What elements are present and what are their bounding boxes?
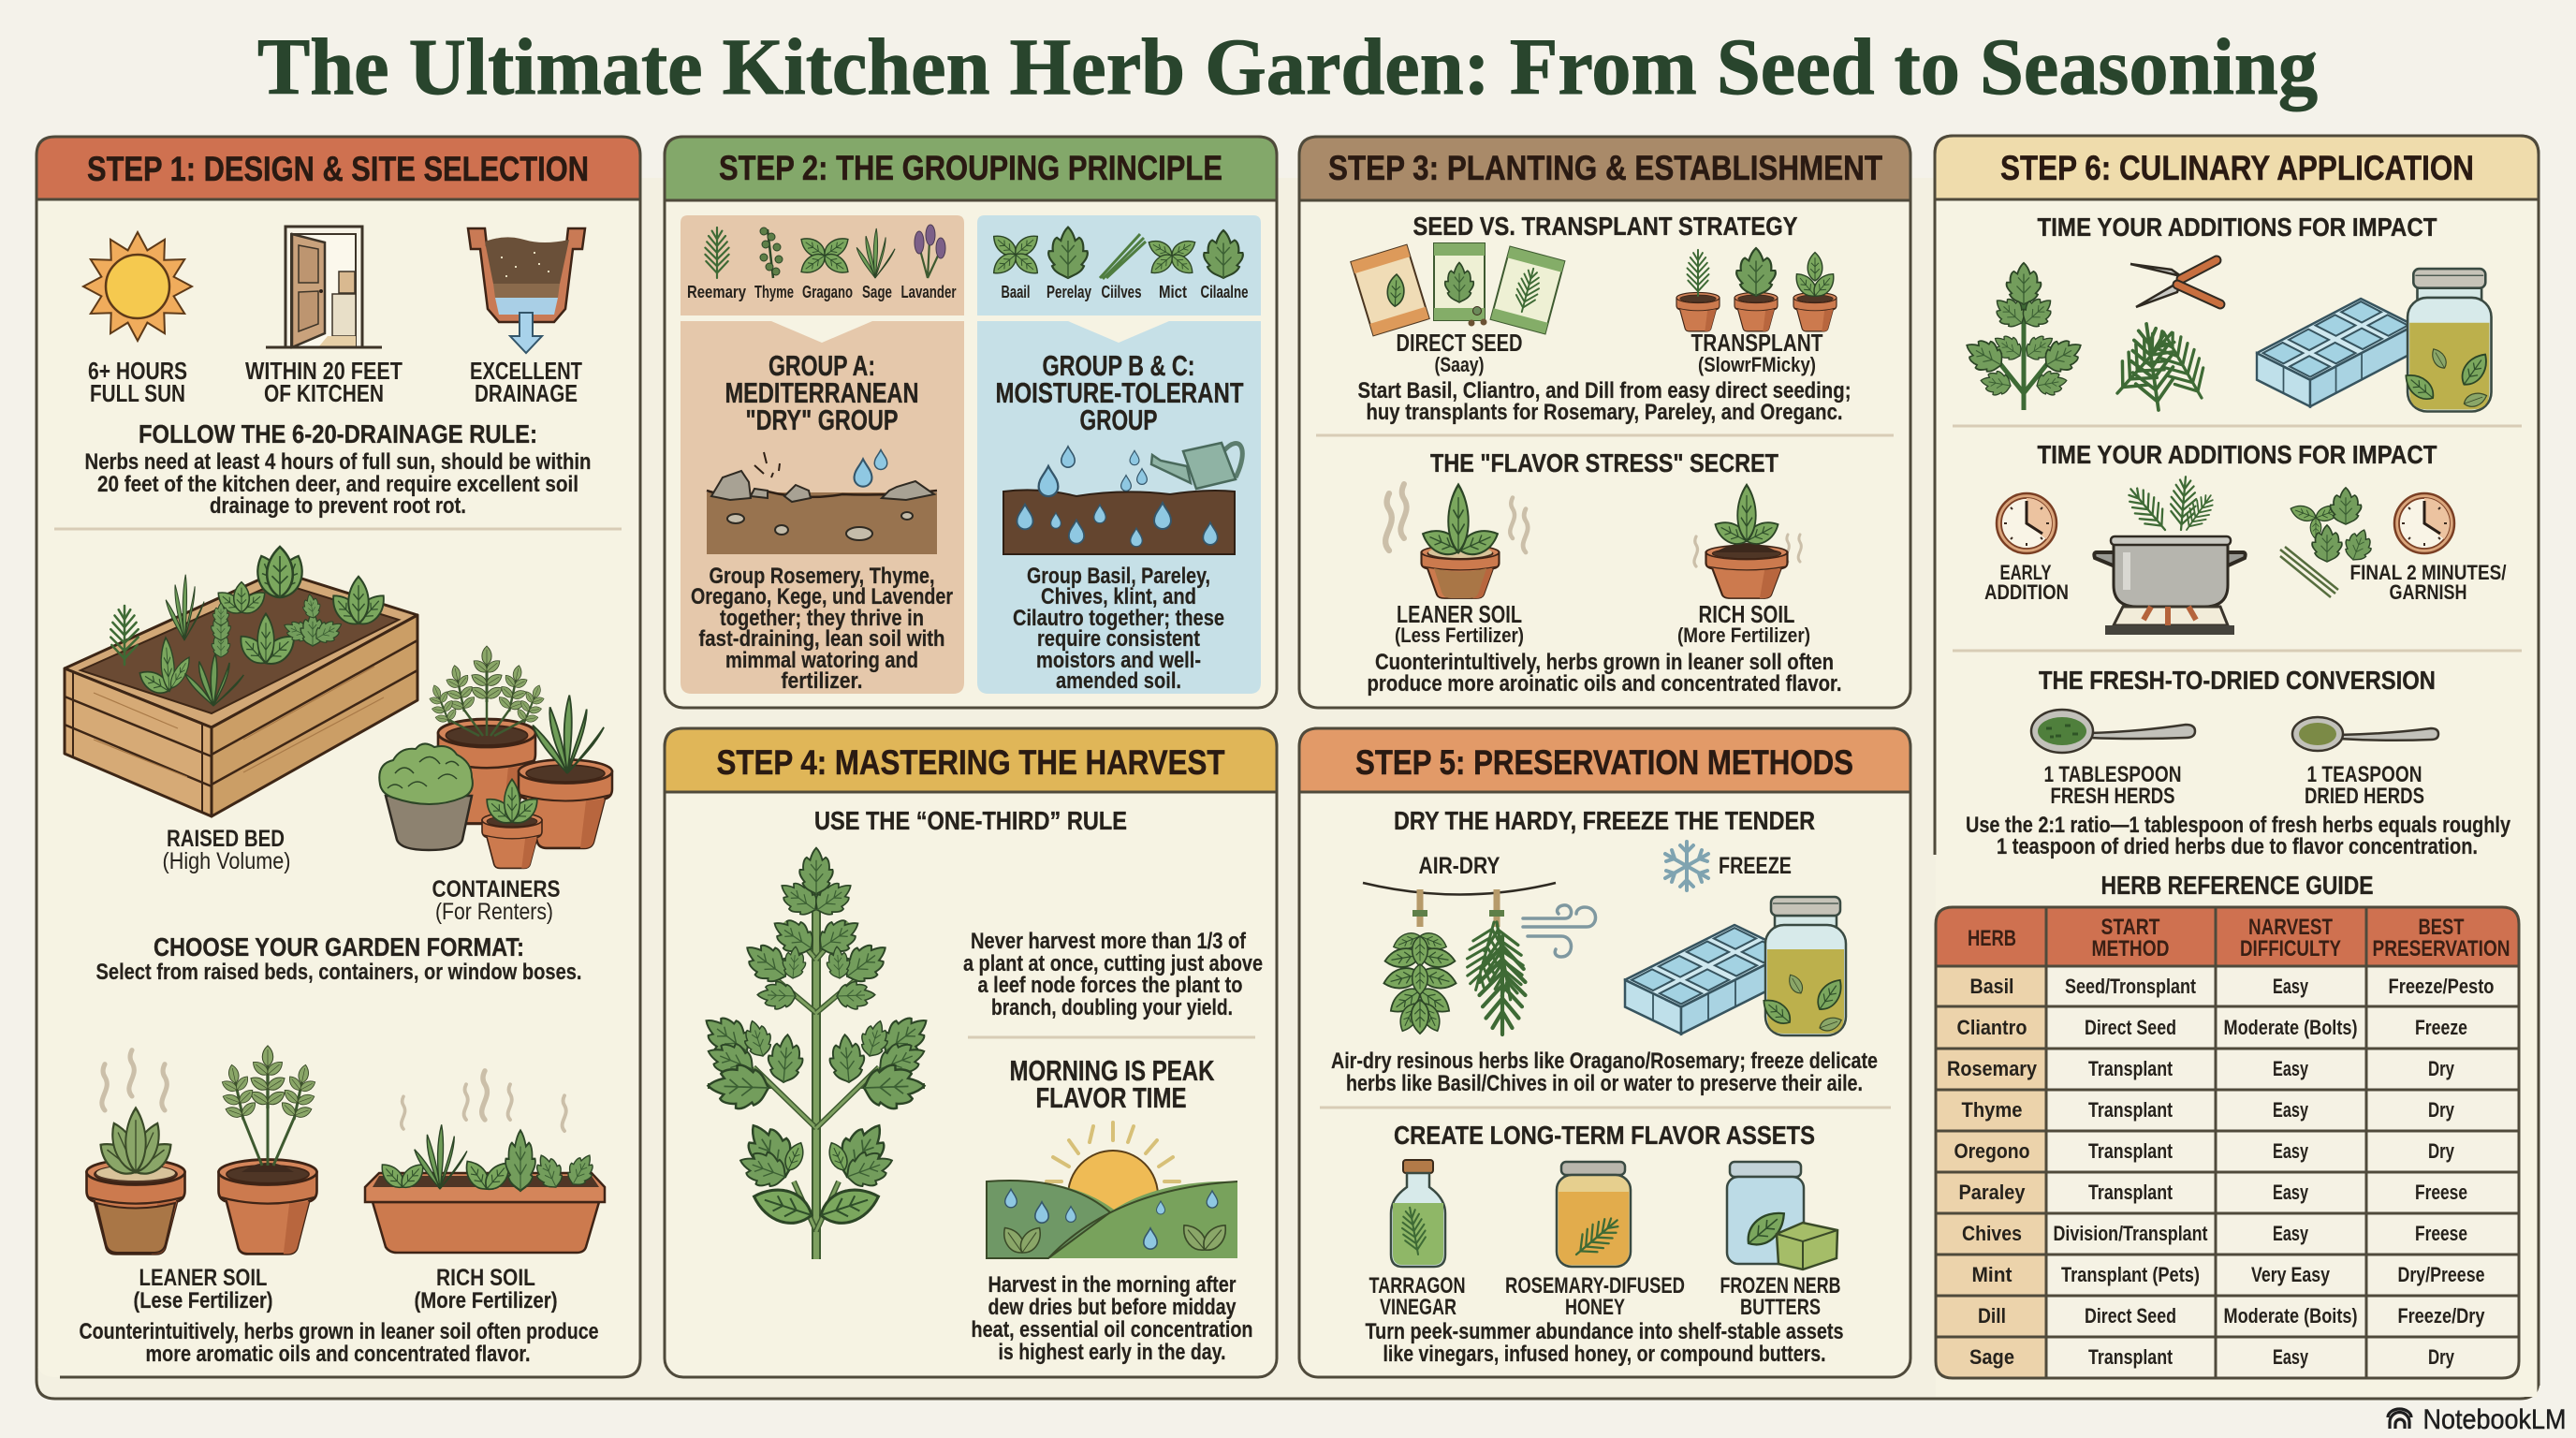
row: cilantro: Freeze	[2415, 1016, 2467, 1039]
row: mint: Very Easy	[2251, 1263, 2331, 1286]
label: rich soil	[1677, 600, 1810, 647]
label: containers: CONTAINERS	[432, 876, 560, 902]
heading: group B and C: MOISTURE-TOLERANT	[996, 376, 1244, 409]
label: rosemary honey: ROSEMARY-DIFUSED	[1505, 1273, 1685, 1299]
row: oregano: Easy	[2273, 1139, 2309, 1163]
panel: step 3 planting and establishment	[1299, 137, 1910, 708]
text: group B and C body: moistors and well-	[1036, 648, 1201, 673]
heading: garden format: CHOOSE YOUR GARDEN FORMAT:	[154, 932, 524, 961]
labels: moist herbs: Ciilves	[1101, 283, 1142, 301]
label: transplant: (SlowrFMicky)	[1698, 353, 1816, 376]
icon: clock early	[1997, 493, 2056, 553]
text: dry and freeze body: Air-dry resinous herbs like Oragano/Rosemary; freeze delicate	[1331, 1049, 1878, 1074]
label: raised bed	[163, 826, 290, 874]
labels: moist herbs: Perelay	[1046, 283, 1091, 301]
text: morning body	[972, 1272, 1252, 1365]
text: flavor assets body	[1365, 1319, 1844, 1367]
label: teaspoon: 1 TEASPOON	[2306, 762, 2422, 787]
row: rosemary: Dry	[2428, 1057, 2455, 1080]
heading: group A: MEDITERRANEAN	[724, 376, 919, 409]
text: drainage rule body: Nerbs need at least 4 hours of full sun, should be within	[84, 449, 592, 475]
heading: group A: "DRY" GROUP	[745, 404, 899, 436]
illustration: leaner pot	[1385, 484, 1528, 598]
label: within 20 feet: WITHIN 20 FEET	[245, 357, 402, 385]
text: seed strategy body: Start Basil, Cliantro, and Dill from easy direct seeding;	[1357, 378, 1852, 404]
icons: moist herbs	[989, 227, 1243, 279]
text: group A body: mimmal watoring and	[725, 648, 918, 673]
heading: flavor stress: THE "FLAVOR STRESS" SECRET	[1430, 448, 1778, 477]
row: chives: Easy	[2273, 1222, 2309, 1245]
row: rosemary: Transplant	[2088, 1057, 2174, 1080]
bed plant: broad leaves back	[251, 547, 309, 602]
label: containers: (For Renters)	[435, 899, 553, 925]
row: mint: Mint	[1971, 1263, 2012, 1286]
text: morning body: heat, essential oil concentration	[972, 1317, 1252, 1343]
label: excellent drainage: EXCELLENT	[470, 357, 582, 385]
text: conversion body: 1 teaspoon of dried herbs due to flavor concentration.	[1997, 834, 2478, 859]
text: group B and C body: amended soil.	[1056, 668, 1181, 694]
row: sage: Dry	[2428, 1345, 2455, 1369]
illustration: tender herbs	[2280, 488, 2377, 597]
label: leaner soil: LEANER SOIL	[1397, 600, 1522, 628]
row: oregano: Dry	[2428, 1139, 2455, 1163]
bed plant: front blades	[185, 653, 243, 706]
icons: transplant pots	[1676, 248, 1839, 331]
text: group A body: Group Rosemery, Thyme,	[710, 564, 934, 589]
label: excellent drainage: DRAINAGE	[475, 379, 578, 407]
labels: moist herbs	[1002, 283, 1249, 301]
icon: tarragon vinegar bottle	[1391, 1160, 1445, 1267]
card: group A	[681, 215, 964, 694]
label: teaspoon	[2305, 762, 2424, 809]
labels: dry herbs: Gragano	[802, 283, 853, 301]
label: tarragon vinegar: VINEGAR	[1380, 1295, 1456, 1320]
row: chives	[1962, 1222, 2467, 1245]
illustration: morning sunrise	[987, 1123, 1237, 1258]
text: one-third rule body: a plant at once, cutting just above	[963, 951, 1263, 976]
icon: kitchen door	[266, 227, 382, 347]
heading: fresh to dried: THE FRESH-TO-DRIED CONVERSION	[2039, 666, 2436, 695]
label: frozen herb butters: BUTTERS	[1740, 1295, 1821, 1320]
illustration: dry rocky soil	[707, 449, 937, 554]
text: group A body: fertilizer.	[781, 668, 863, 694]
illustration: herb plant	[695, 848, 937, 1259]
label: excellent drainage	[470, 357, 582, 407]
row: dill: Dill	[1978, 1304, 2006, 1328]
text: one-third rule body: a leef node forces the plant to	[977, 973, 1243, 998]
label: rosemary honey	[1505, 1273, 1685, 1320]
text: drainage rule body	[84, 449, 592, 519]
text: one-third rule body: branch, doubling your yield.	[991, 995, 1233, 1020]
text: morning body: is highest early in the day.	[998, 1340, 1226, 1365]
label: within 20 feet	[245, 357, 402, 407]
label: full sun	[88, 357, 187, 407]
labels: dry herbs: Sage	[862, 283, 892, 301]
illustration: fresh parsley	[1959, 263, 2088, 410]
row: cilantro: Cliantro	[1956, 1016, 2027, 1039]
bed plant: tall blades	[166, 575, 204, 640]
row: basil: Seed/Tronsplant	[2065, 975, 2197, 998]
heading: morning peak: MORNING IS PEAK	[1009, 1054, 1215, 1087]
label: tablespoon: FRESH HERDS	[2050, 784, 2175, 809]
row: basil: Basil	[1969, 975, 2014, 998]
row: oregano: Oregono	[1954, 1139, 2029, 1163]
text: seed strategy body: huy transplants for Rosemary, Pareley, and Oreganc.	[1367, 400, 1842, 425]
text: flavor stress body	[1367, 650, 1842, 697]
heading: one-third rule: USE THE “ONE-THIRD” RULE	[814, 806, 1127, 835]
label: tablespoon	[2044, 762, 2181, 809]
row: thyme	[1962, 1098, 2455, 1122]
row: dill: Direct Seed	[2085, 1304, 2176, 1328]
row: sage: Transplant	[2088, 1345, 2174, 1369]
label: rich soil: (More Fertilizer)	[1677, 624, 1810, 647]
label: full sun: 6+ HOURS	[88, 357, 187, 385]
table header: START	[2100, 915, 2160, 940]
table header: HERB	[1968, 926, 2016, 951]
table grid	[1936, 907, 2519, 1378]
panel: step 6 culinary application	[1935, 136, 2539, 1397]
label: raised bed: (High Volume)	[163, 848, 290, 874]
row: rosemary: Rosemary	[1947, 1057, 2038, 1080]
heading: 6-20-drainage rule: FOLLOW THE 6-20-DRAINAGE RULE:	[139, 419, 537, 448]
label: final garnish: GARNISH	[2389, 580, 2467, 604]
text: conversion body	[1966, 813, 2511, 859]
label: direct seed: (Saay)	[1434, 353, 1485, 376]
text: morning body: Harvest in the morning after	[988, 1272, 1236, 1298]
row: parsley: Freese	[2415, 1181, 2467, 1204]
illustration: window box	[365, 1071, 605, 1253]
bed plant: low clump	[213, 582, 270, 618]
heading: group A: GROUP A:	[768, 349, 875, 382]
label: containers	[432, 876, 560, 925]
label: transplant	[1690, 329, 1823, 376]
row: rosemary: Easy	[2273, 1057, 2309, 1080]
heading: herb reference guide: HERB REFERENCE GUIDE	[2100, 871, 2374, 900]
text: group A body: Oregano, Kege, und Lavender	[691, 584, 953, 609]
label: leaner soil: (Less Fertilizer)	[1395, 624, 1524, 647]
table header: NARVEST	[2248, 915, 2333, 940]
row: dill: Moderate (Boits)	[2224, 1304, 2357, 1328]
card: group B and C	[977, 215, 1261, 694]
text: dry and freeze body	[1331, 1049, 1878, 1096]
icon: frozen herb butter	[1727, 1162, 1837, 1269]
label: tarragon vinegar	[1368, 1273, 1466, 1320]
label: direct seed	[1397, 329, 1522, 376]
icon: pruning shears	[2130, 260, 2220, 307]
labels: moist herbs: Mict	[1159, 283, 1187, 301]
row: mint: Transplant (Pets)	[2061, 1263, 2200, 1286]
label: freeze: FREEZE	[1719, 853, 1792, 879]
text: group B and C body: Group Basil, Pareley,	[1027, 564, 1210, 589]
label: leaner soil: (Lese Fertilizer)	[133, 1288, 273, 1313]
row: sage: Easy	[2273, 1345, 2309, 1369]
heading: group B and C: GROUP B & C:	[1043, 349, 1194, 382]
icons: dry herbs	[705, 225, 945, 278]
heading: group A	[724, 349, 919, 436]
illustration: containers	[379, 646, 612, 868]
row: thyme: Thyme	[1962, 1098, 2022, 1122]
illustration: cut herbs	[2103, 320, 2217, 413]
row: basil: Freeze/Pesto	[2389, 975, 2494, 998]
heading: step 6: STEP 6: CULINARY APPLICATION	[2000, 149, 2474, 187]
row: cilantro	[1956, 1016, 2467, 1039]
row: basil: Easy	[2273, 975, 2309, 998]
row: parsley: Easy	[2273, 1181, 2309, 1204]
row: parsley: Transplant	[2088, 1181, 2174, 1204]
label: final garnish	[2349, 561, 2507, 604]
labels: moist herbs: Cilaalne	[1200, 283, 1249, 301]
icons: seed packets	[1351, 243, 1564, 335]
label: teaspoon: DRIED HERDS	[2305, 784, 2424, 809]
row: parsley: Paraley	[1958, 1181, 2026, 1204]
label: early addition	[1984, 561, 2069, 604]
row: chives: Chives	[1962, 1222, 2022, 1245]
label: final garnish: FINAL 2 MINUTES/	[2349, 561, 2507, 584]
row: mint: Dry/Preese	[2398, 1263, 2484, 1286]
row: dill: Freeze/Dry	[2398, 1304, 2485, 1328]
labels: dry herbs: Reemary	[687, 283, 746, 301]
label: rosemary honey: HONEY	[1565, 1295, 1625, 1320]
heading: step 5: STEP 5: PRESERVATION METHODS	[1355, 743, 1853, 782]
row: sage: Sage	[1969, 1345, 2014, 1369]
table header: PRESERVATION	[2372, 936, 2510, 961]
panel: step 5 preservation methods	[1299, 728, 1910, 1377]
heading: morning peak	[1009, 1054, 1215, 1114]
table header	[1968, 915, 2510, 961]
text: garden format body: Select from raised beds, containers, or window boses.	[95, 960, 582, 985]
label: leaner soil: LEANER SOIL	[139, 1265, 268, 1291]
row: thyme: Easy	[2273, 1098, 2309, 1122]
text: morning body: dew dries but before midday	[988, 1295, 1237, 1320]
icon: snowflake	[1665, 842, 1708, 890]
icon: NotebookLM logo	[2388, 1409, 2411, 1429]
bundle: rosemary	[1460, 889, 1529, 1034]
title: The Ultimate Kitchen Herb Garden: From Seed to Seasoning	[257, 22, 2318, 111]
table header: METHOD	[2091, 936, 2170, 961]
illustration: moist soil and watering can	[1003, 443, 1242, 554]
row: cilantro: Moderate (Bolts)	[2224, 1016, 2357, 1039]
row: chives: Freese	[2415, 1222, 2467, 1245]
panel: step 1 design and site selection	[37, 137, 640, 1377]
text: group B and C body: Chives, klint, and	[1041, 584, 1196, 609]
label: rich soil: RICH SOIL	[1698, 600, 1795, 628]
labels: dry herbs: Lavander	[900, 283, 957, 301]
heading: group B and C	[996, 349, 1244, 436]
text: group B and C body	[1013, 564, 1224, 694]
label: early addition: ADDITION	[1984, 580, 2069, 604]
row: rosemary	[1947, 1057, 2455, 1080]
row: dill	[1978, 1304, 2485, 1328]
icon: wind	[1523, 905, 1596, 957]
text: flavor stress body: Cuonterintultively, herbs grown in leaner soll often	[1375, 650, 1834, 675]
text: soil note	[79, 1319, 599, 1367]
illustration: ice tray and oil jar	[2257, 269, 2493, 412]
text: group A body: together; they thrive in	[720, 606, 924, 631]
icon: teaspoon	[2292, 717, 2438, 751]
labels: dry herbs: Thyme	[754, 283, 794, 301]
icon: tablespoon	[2031, 710, 2195, 753]
heading: step 2: STEP 2: THE GROUPING PRINCIPLE	[719, 149, 1222, 187]
label: raised bed: RAISED BED	[167, 826, 285, 852]
heading: time additions 1: TIME YOUR ADDITIONS FOR IMPACT	[2037, 213, 2437, 242]
pot: back terracotta with thyme	[422, 646, 551, 824]
heading: seed vs transplant: SEED VS. TRANSPLANT STRATEGY	[1413, 212, 1798, 241]
pot: small front with sprout	[481, 779, 543, 868]
illustration: leaner soil pot	[86, 1050, 185, 1254]
text: one-third rule body	[963, 929, 1263, 1020]
row: mint	[1971, 1263, 2484, 1286]
label: frozen herb butters	[1720, 1273, 1840, 1320]
text: dry and freeze body: herbs like Basil/Chives in oil or water to preserve their aile.	[1346, 1071, 1863, 1096]
label: direct seed: DIRECT SEED	[1397, 329, 1522, 357]
labels: dry herbs	[687, 283, 957, 301]
text: drainage rule body: 20 feet of the kitchen deer, and require excellent soil	[97, 472, 578, 497]
row: thyme: Dry	[2428, 1098, 2455, 1122]
icon: sun	[83, 232, 192, 341]
text: soil note: Counterintuitively, herbs grown in leaner soil often produce	[79, 1319, 599, 1344]
label: air-dry: AIR-DRY	[1419, 853, 1500, 879]
icon: clock final	[2394, 493, 2454, 553]
illustration: raised bed	[65, 547, 417, 816]
label: tablespoon: 1 TABLESPOON	[2044, 762, 2181, 787]
heading: group B and C: GROUP	[1080, 404, 1157, 436]
bed plant: front herb	[135, 638, 194, 698]
illustration: pot on burner	[2094, 476, 2246, 635]
bed plant: two leaves	[234, 614, 300, 670]
text: soil note: more aromatic oils and concentrated flavor.	[146, 1342, 530, 1367]
heading: step 1: STEP 1: DESIGN & SITE SELECTION	[87, 150, 589, 188]
illustration: rich pot	[1694, 485, 1801, 598]
text: seed strategy body	[1357, 378, 1852, 425]
label: early addition: EARLY	[1999, 561, 2052, 584]
label: rich soil	[414, 1265, 558, 1313]
panel: step 4 mastering the harvest	[665, 728, 1277, 1377]
labels: moist herbs: Baail	[1002, 283, 1030, 301]
heading: morning peak: FLAVOR TIME	[1035, 1081, 1187, 1114]
label: full sun: FULL SUN	[90, 379, 185, 407]
row: sage	[1969, 1345, 2455, 1369]
text: flavor assets body: Turn peek-summer abundance into shelf-stable assets	[1365, 1319, 1844, 1344]
illustration: rich soil pot	[214, 1046, 323, 1254]
table: herb reference	[1936, 907, 2519, 1378]
label: leaner soil	[133, 1265, 273, 1313]
text: group A body	[691, 564, 953, 694]
text: group A body: fast-draining, lean soil with	[698, 626, 945, 652]
label: rich soil: (More Fertilizer)	[414, 1288, 558, 1313]
pot: right terracotta with blades	[519, 696, 612, 848]
heading: dry and freeze: DRY THE HARDY, FREEZE THE TENDER	[1394, 806, 1815, 835]
heading: step 4: STEP 4: MASTERING THE HARVEST	[717, 743, 1225, 782]
bed plant: lobed cluster	[280, 593, 346, 648]
text: flavor assets body: like vinegars, infused honey, or compound butters.	[1383, 1342, 1825, 1367]
illustration: hanging herb bundles	[1363, 883, 1596, 1034]
text: drainage rule body: drainage to prevent root rot.	[210, 493, 466, 519]
text: flavor stress body: produce more aroinatic oils and concentrated flavor.	[1367, 671, 1842, 697]
row: oregano: Transplant	[2088, 1139, 2174, 1163]
table header: BEST	[2419, 915, 2465, 940]
icon: drainage pot	[468, 228, 585, 353]
label: frozen herb butters: FROZEN NERB	[1720, 1273, 1840, 1299]
pot: grey with lettuce	[379, 743, 473, 850]
label: within 20 feet: OF KITCHEN	[264, 379, 384, 407]
row: basil	[1969, 975, 2494, 998]
label: leaner soil	[1395, 600, 1524, 647]
heading: time additions 2: TIME YOUR ADDITIONS FOR IMPACT	[2037, 440, 2437, 469]
row: cilantro: Direct Seed	[2085, 1016, 2176, 1039]
bed plant: right clump	[327, 577, 390, 630]
icon: rosemary honey jar	[1557, 1162, 1631, 1267]
row: parsley	[1958, 1181, 2467, 1204]
bed plant: small lobed	[212, 603, 230, 657]
text: one-third rule body: Never harvest more than 1/3 of	[971, 929, 1247, 954]
row: chives: Division/Transplant	[2054, 1222, 2208, 1245]
bundle: oregano	[1382, 889, 1458, 1034]
panel: step 2 the grouping principle	[665, 137, 1277, 708]
label: transplant: TRANSPLANT	[1690, 329, 1823, 357]
table cells	[1936, 907, 2519, 1378]
label: rich soil: RICH SOIL	[436, 1265, 535, 1291]
label: tarragon vinegar: TARRAGON	[1368, 1273, 1466, 1299]
row: oregano	[1954, 1139, 2455, 1163]
heading: flavor assets: CREATE LONG-TERM FLAVOR ASSETS	[1394, 1121, 1815, 1150]
illustration: ice tray and oil jar	[1625, 897, 1848, 1035]
text: group B and C body: Cilautro together; these	[1013, 606, 1224, 631]
row: thyme: Transplant	[2088, 1098, 2174, 1122]
table header: DIFFICULTY	[2240, 936, 2341, 961]
bed plant: rosemary sprig	[110, 606, 139, 665]
heading: step 3: STEP 3: PLANTING & ESTABLISHMENT	[1328, 149, 1882, 187]
text: group B and C body: require consistent	[1037, 626, 1200, 652]
